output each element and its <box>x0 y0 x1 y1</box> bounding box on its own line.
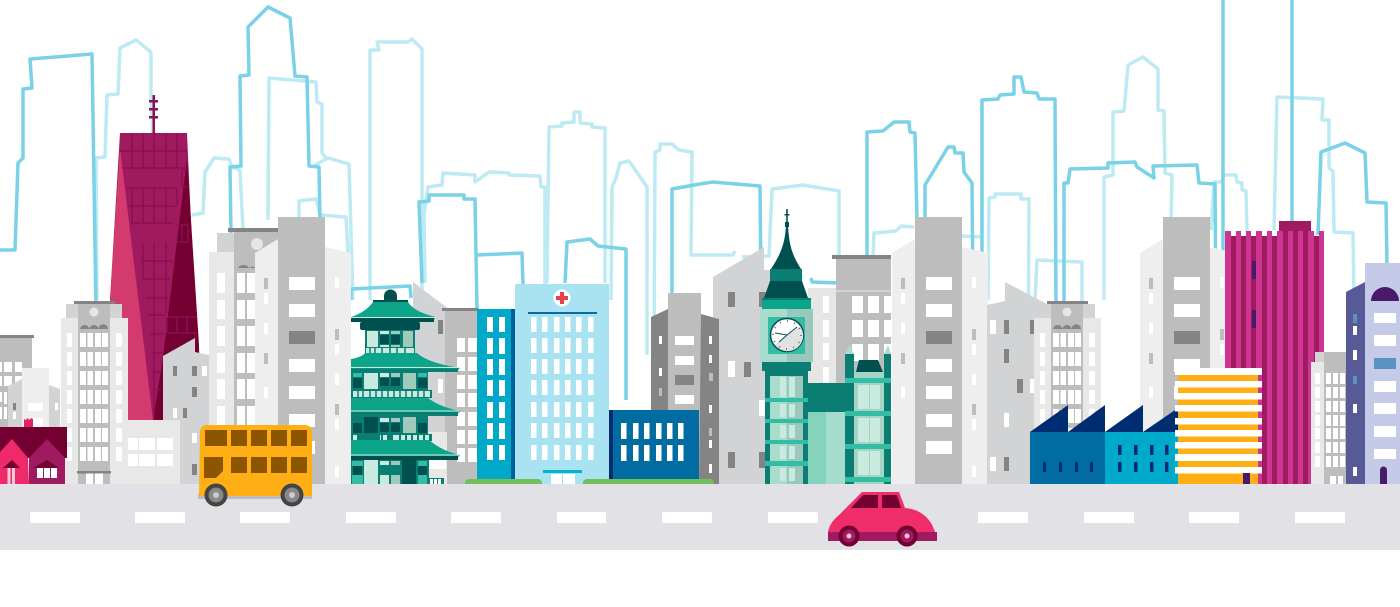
building: crimson skyscraper <box>108 95 201 420</box>
pagoda floor 2 <box>351 372 428 390</box>
building: grey gabled <box>987 282 1047 484</box>
pagoda roof 4 <box>351 440 460 460</box>
light outline skyline <box>96 39 1354 385</box>
car <box>828 492 937 546</box>
building: lavender <box>1346 263 1400 484</box>
building: blue low-rise <box>609 410 699 484</box>
pagoda <box>351 290 460 484</box>
road <box>0 484 1400 550</box>
building: magenta tower <box>1225 221 1324 484</box>
palace wing <box>808 345 891 484</box>
spire <box>764 209 808 298</box>
buildings: grey behind palace <box>808 255 891 484</box>
building: teal <box>477 309 515 484</box>
road dashes <box>30 512 1345 523</box>
building: small grey low-rise <box>128 338 209 484</box>
pagoda roof 1 <box>351 302 436 322</box>
house <box>0 418 67 484</box>
building: grey behind clock tower <box>713 247 772 484</box>
car wheels <box>838 526 918 546</box>
bus wheels <box>204 484 304 506</box>
icon: red cross <box>554 290 570 306</box>
building: dark grey <box>651 293 719 484</box>
factory <box>1030 405 1178 484</box>
bus windows <box>204 430 307 478</box>
pagoda floor 4 <box>351 460 429 484</box>
hospital <box>515 284 609 484</box>
building: grey with arches <box>209 228 280 484</box>
building: tall grey left <box>255 217 351 484</box>
building: small grey right <box>1311 352 1346 484</box>
building: right tower with arches <box>1034 301 1101 484</box>
pagoda roof 3 <box>351 398 460 416</box>
clock face <box>770 318 804 352</box>
building: left tower with arches <box>61 301 128 484</box>
pagoda roof 2 <box>351 353 460 372</box>
pagoda floor 3 <box>351 416 428 434</box>
building: grey behind pagoda <box>413 282 478 484</box>
green bushes <box>465 479 714 484</box>
bus <box>198 425 312 506</box>
pagoda floor 1 <box>365 330 415 353</box>
antenna <box>149 95 158 134</box>
clock tower <box>760 209 813 484</box>
dark outline skyline <box>0 0 1387 400</box>
building: tall grey right <box>1140 217 1236 484</box>
building: tall grey centre <box>892 217 988 484</box>
building: far left grey <box>0 335 60 427</box>
building: yellow striped <box>1175 368 1262 484</box>
